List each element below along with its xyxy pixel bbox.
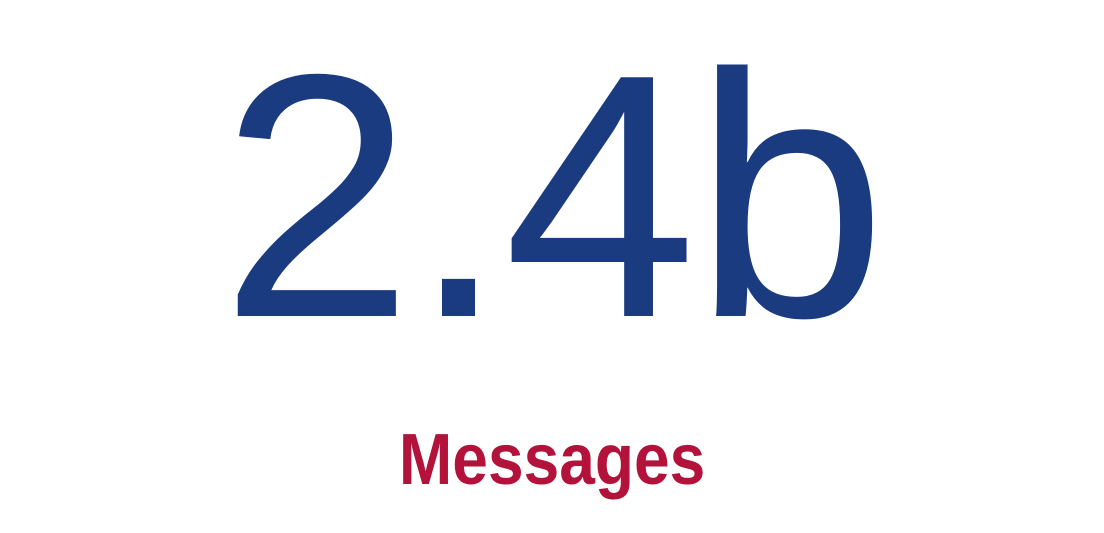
headline number: 2.4b: [220, 2, 884, 390]
label: Messages: Messages: [399, 420, 705, 500]
